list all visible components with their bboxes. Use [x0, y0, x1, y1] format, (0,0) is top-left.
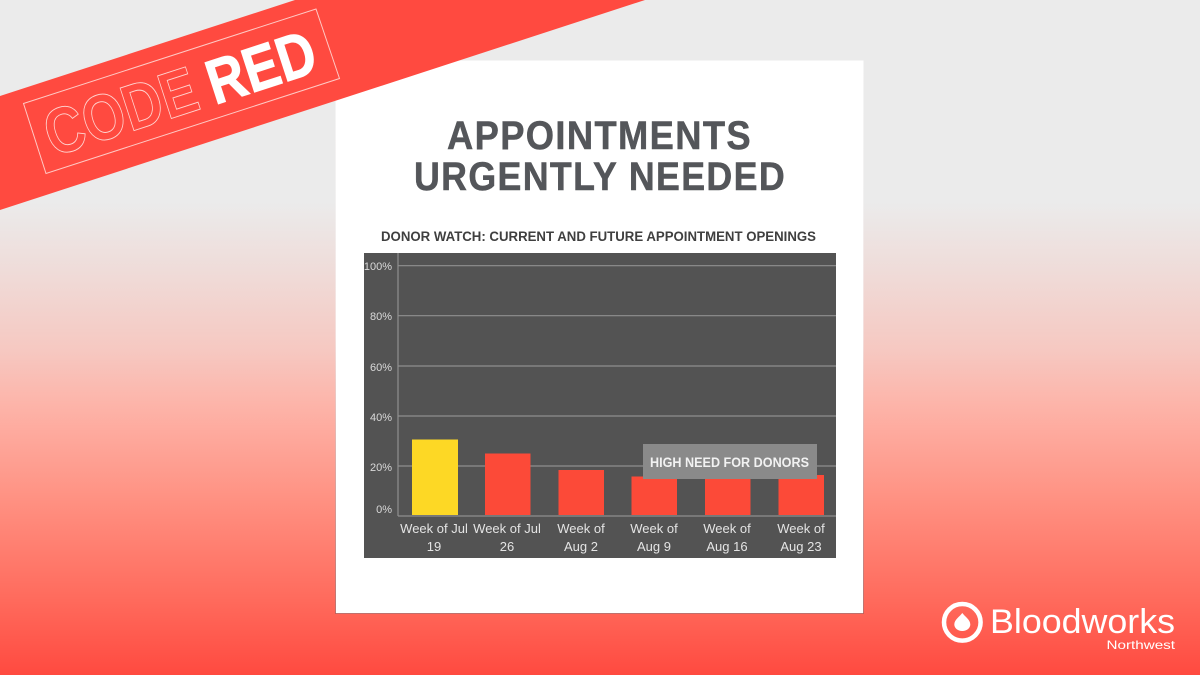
- x-axis labels: 26: [500, 539, 514, 554]
- bar chart: [364, 253, 836, 558]
- x-axis labels: Week of: [557, 521, 605, 536]
- title: URGENTLY NEEDED: [414, 155, 786, 199]
- title: APPOINTMENTS: [447, 114, 752, 158]
- y-axis labels: 40%: [370, 412, 392, 424]
- grid lines and axes: [398, 253, 836, 516]
- callout: high need for donors: HIGH NEED FOR DONORS: [650, 455, 809, 470]
- x-axis labels: Week of Jul: [473, 521, 541, 536]
- banner text: code: CODE: [35, 52, 207, 170]
- x-axis labels: Week of Jul: [400, 521, 468, 536]
- y-axis labels: 0%: [376, 504, 392, 516]
- x-axis labels: Aug 23: [780, 539, 822, 554]
- x-axis labels: [400, 521, 825, 554]
- title: [414, 114, 786, 199]
- x-axis labels: Week of: [630, 521, 678, 536]
- wordmark: Bloodworks: [990, 603, 1175, 641]
- y-axis labels: 100%: [364, 261, 392, 273]
- x-axis labels: Aug 9: [637, 539, 671, 554]
- banner outline: [24, 9, 340, 174]
- banner: code red: [0, 0, 645, 210]
- x-axis labels: 19: [427, 539, 441, 554]
- banner text: red: RED: [198, 17, 325, 118]
- x-axis labels: Aug 2: [564, 539, 598, 554]
- wordmark subtitle: Northwest: [1106, 638, 1176, 652]
- y-axis labels: 80%: [370, 311, 392, 323]
- y-axis labels: 60%: [370, 362, 392, 374]
- x-axis labels: Week of: [777, 521, 825, 536]
- callout: high need for donors: [643, 444, 817, 479]
- logo: Bloodworks Northwest: [944, 603, 1176, 652]
- bars: [412, 440, 824, 515]
- y-axis labels: 20%: [370, 462, 392, 474]
- y-axis labels: [364, 261, 392, 516]
- chart heading: DONOR WATCH: CURRENT AND FUTURE APPOINTMENT OPENINGS: [381, 229, 816, 244]
- panel: appointments card: [336, 60, 864, 614]
- icon: blood drop in ring: [944, 604, 981, 641]
- x-axis labels: Aug 16: [706, 539, 748, 554]
- x-axis labels: Week of: [703, 521, 751, 536]
